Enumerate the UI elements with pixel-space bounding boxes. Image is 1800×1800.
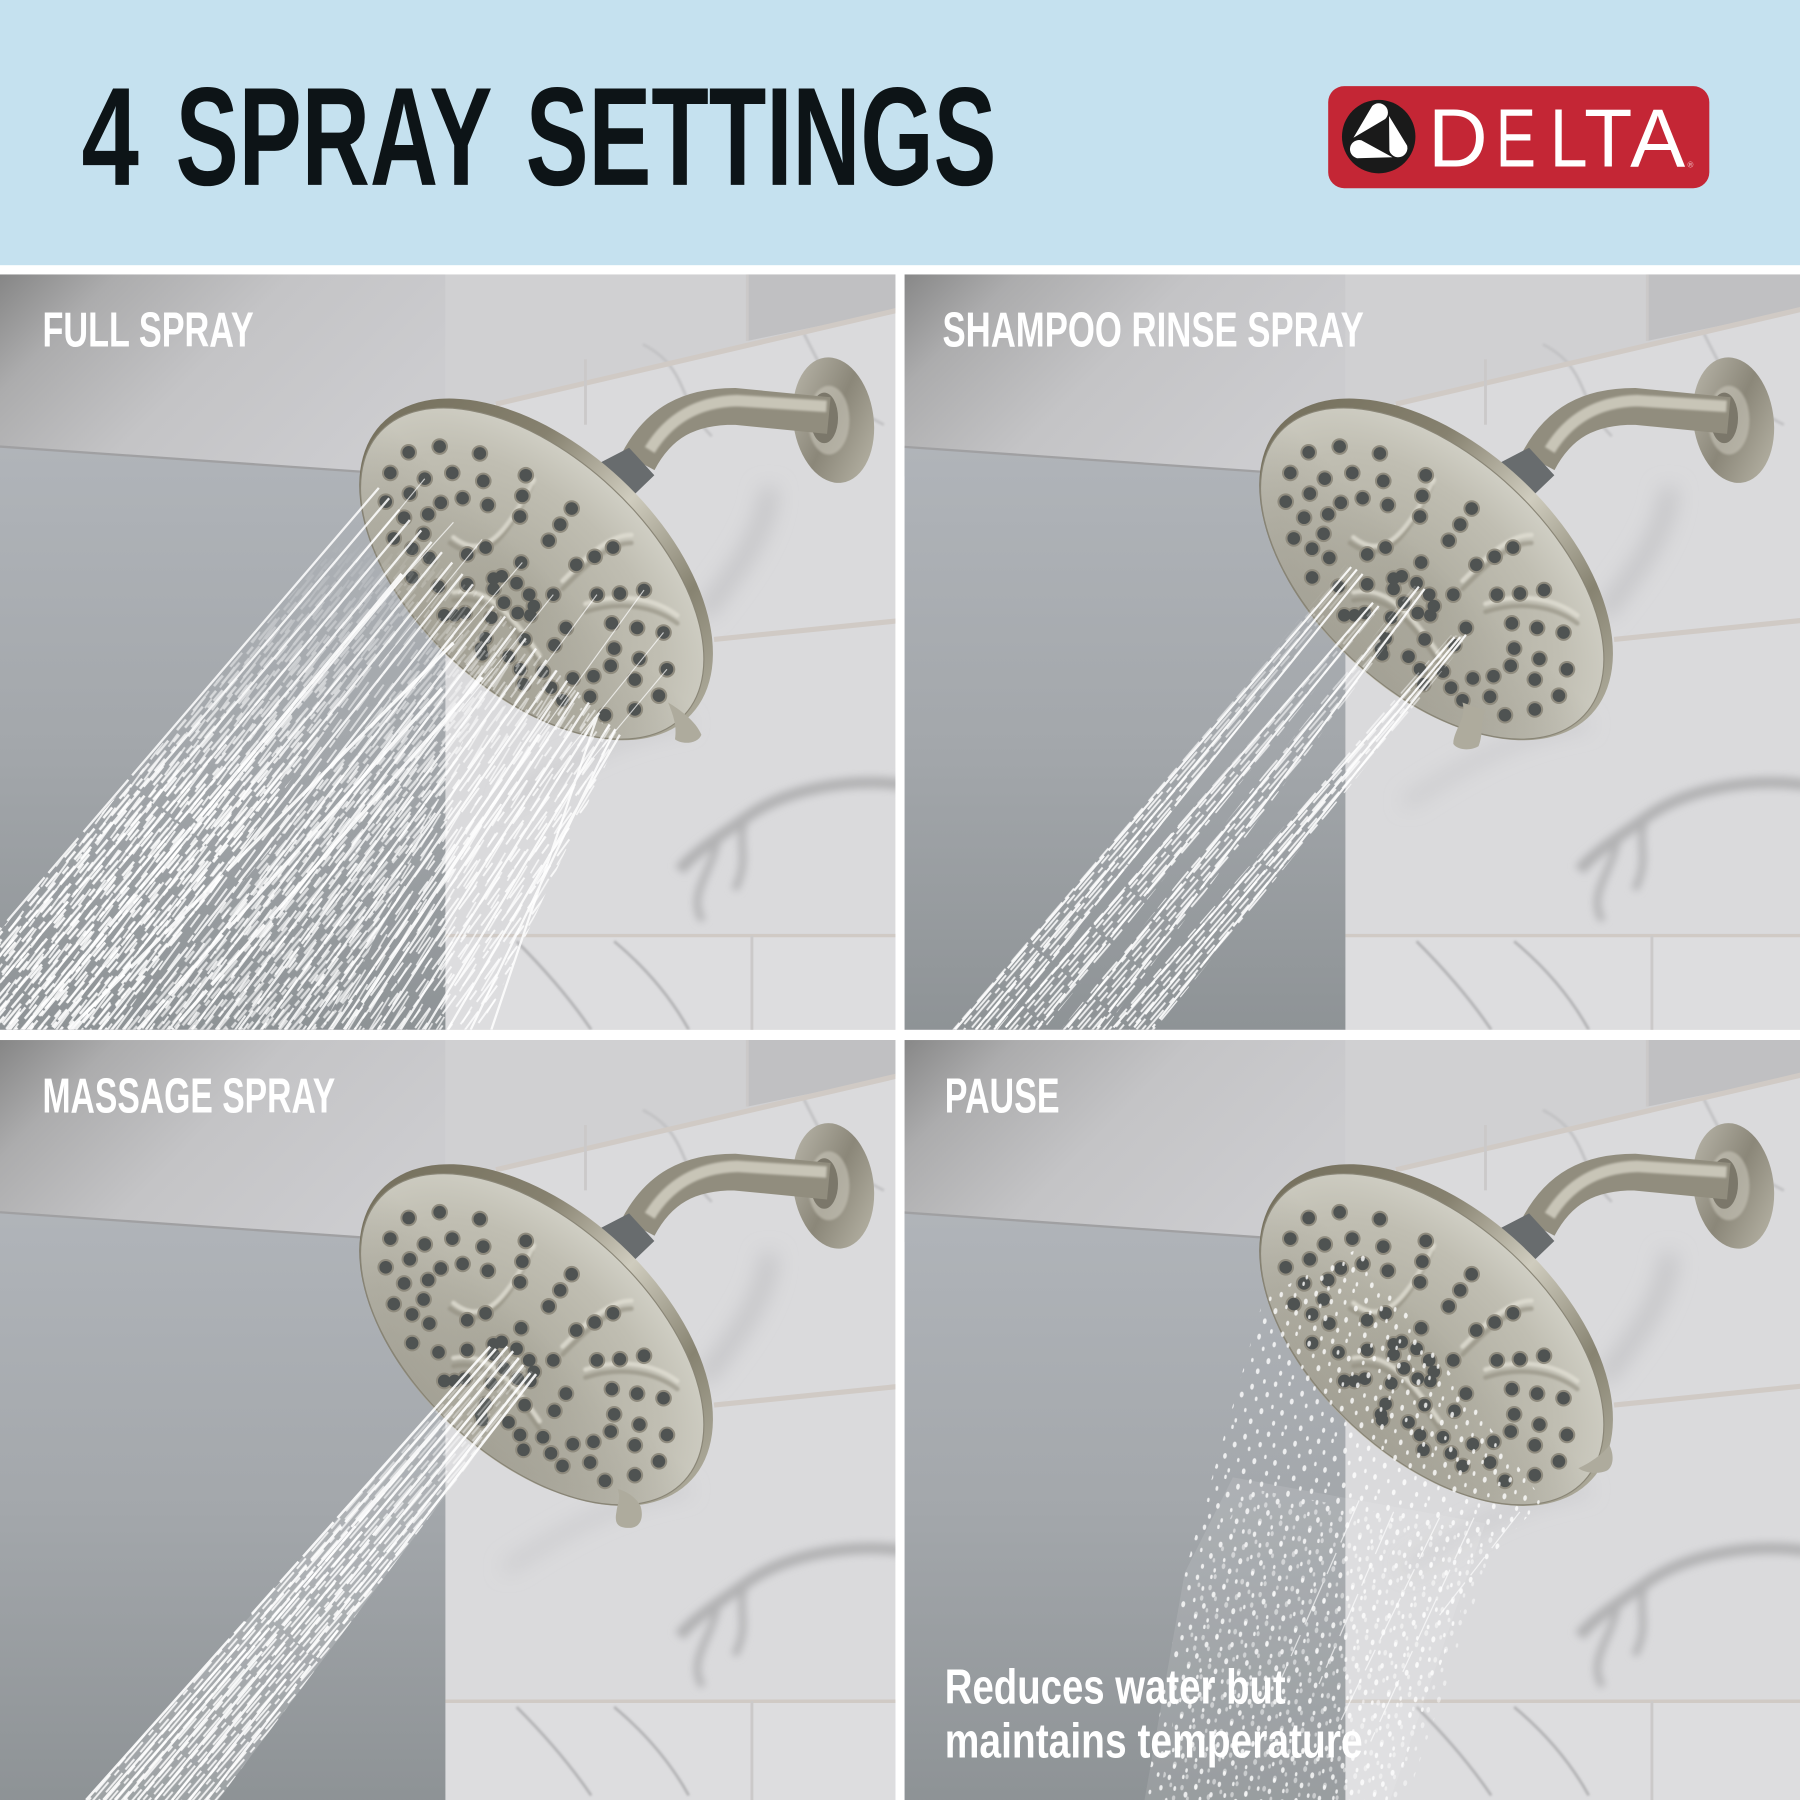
title: 4 — [82, 58, 139, 215]
label: shampoo rinse spray: SHAMPOO RINSE SPRAY — [942, 303, 1364, 358]
title: SPRAY — [176, 58, 492, 215]
panel: massage spray — [0, 1040, 918, 1800]
logo: Delta: ® — [1688, 161, 1694, 170]
logo: Delta — [1328, 86, 1709, 188]
logo: Delta: T — [1584, 91, 1632, 184]
caption: pause description: maintains temperature — [945, 1714, 1363, 1769]
label: full spray: FULL SPRAY — [42, 303, 254, 358]
header band — [0, 0, 1800, 265]
logo: Delta: A — [1630, 91, 1685, 184]
title: SETTINGS — [526, 58, 996, 215]
panel: shampoo rinse spray — [900, 274, 1800, 1043]
logo: Delta: D — [1428, 91, 1488, 184]
caption: pause description — [945, 1660, 1363, 1769]
label: pause: PAUSE — [945, 1068, 1060, 1123]
panel: pause — [900, 1040, 1800, 1800]
logo: Delta: L — [1550, 91, 1588, 184]
panel: full spray — [0, 274, 918, 1043]
caption: pause description: Reduces water but — [945, 1660, 1286, 1715]
label: massage spray: MASSAGE SPRAY — [42, 1068, 335, 1123]
logo: Delta: E — [1496, 91, 1536, 184]
